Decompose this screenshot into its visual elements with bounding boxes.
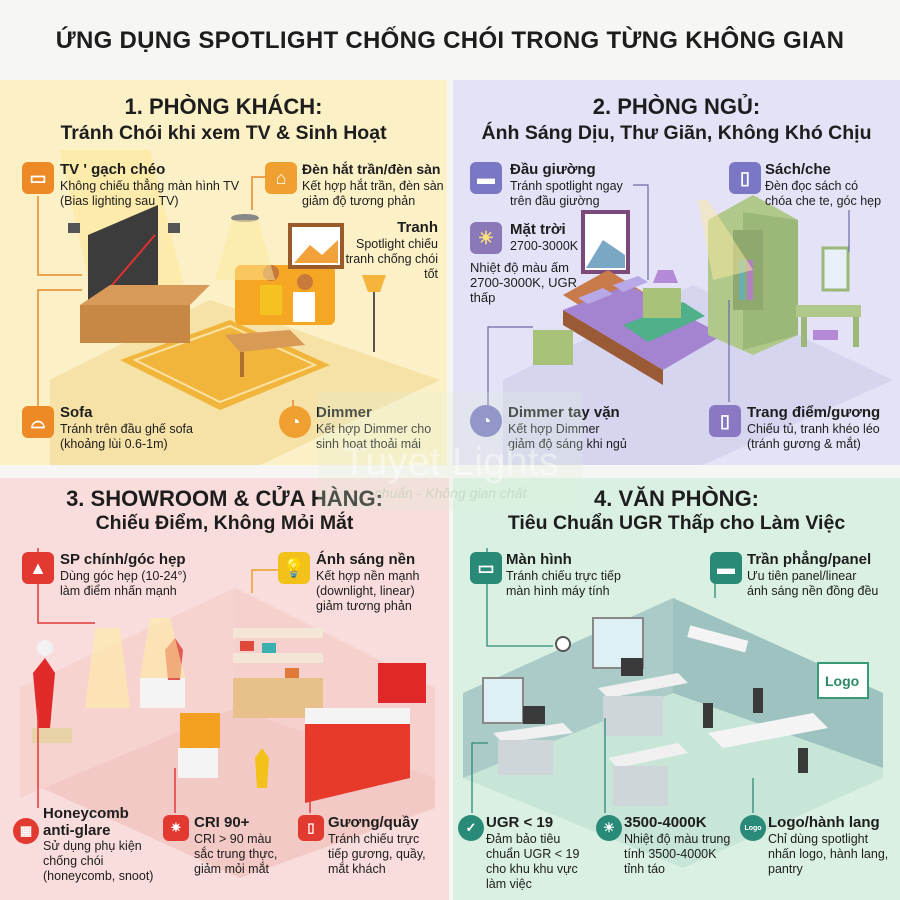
item: logo/hành lang: Logo xyxy=(744,824,762,832)
illustration: showroom xyxy=(20,548,435,878)
item: TV xyxy=(22,161,239,208)
item: CRI xyxy=(163,814,277,876)
item: đèn hắt: Đèn hắt trần/đèn sàn xyxy=(302,161,440,177)
item: màn hình: ▭ xyxy=(477,558,494,578)
heading: 2. PHÒNG NGỦ: xyxy=(593,94,760,119)
item: ánh sáng nền: Kết hợp nền mạnh (downlight, linear) giảm tương phản xyxy=(316,569,419,613)
item: trang điểm: Trang điểm/gương xyxy=(747,404,880,421)
item: đầu giường: ▬ xyxy=(477,168,495,188)
item: trần phẳng: Trần phẳng/panel xyxy=(747,551,871,568)
heading: 3. SHOWROOM & CỬA HÀNG: xyxy=(66,486,383,511)
illustration: bedroom xyxy=(487,184,892,465)
item: dimmer: sinh hoạt thoải mái xyxy=(316,437,421,451)
item: dimmer tay vặn: giảm độ sáng khi ngủ xyxy=(508,437,627,451)
item: SP chính: làm điểm nhấn mạnh xyxy=(60,584,177,598)
item: TV: ▭ xyxy=(29,168,46,188)
item: CRI: CRI > 90 màu sắc trung thực, giảm mỏi mắt xyxy=(194,832,277,876)
item: đèn hắt xyxy=(265,161,444,208)
item: tranh: Tranh xyxy=(397,219,438,236)
item: logo/hành lang: Chỉ dùng spotlight nhấn logo, hành lang, pantry xyxy=(768,832,888,876)
item: tranh: Spotlight chiếu tranh chống chói tốt xyxy=(346,237,438,281)
item: trang điểm xyxy=(709,404,880,451)
item: 3500-4000K: Nhiệt độ màu trung tính 3500-4000K tỉnh táo xyxy=(624,832,730,876)
item: UGR: UGR < 19 xyxy=(486,814,553,831)
item: UGR xyxy=(458,814,579,891)
item: TV: TV ' gạch chéo xyxy=(60,161,165,178)
item: mặt trời: Mặt trời xyxy=(510,221,566,238)
item: UGR: ✓ xyxy=(466,820,476,835)
subheading: Chiếu Điểm, Không Mỏi Mắt xyxy=(96,512,353,534)
item: dimmer: Dimmer xyxy=(316,404,372,421)
item: CRI: CRI 90+ xyxy=(194,814,249,831)
item: đầu giường: trên đầu giường xyxy=(510,194,600,208)
item: gương/quầy xyxy=(298,814,426,876)
item: mặt trời: Nhiệt độ màu ấm 2700-3000K, UGR thấp xyxy=(470,260,577,305)
watermark xyxy=(318,392,583,510)
item: ánh sáng nền xyxy=(278,550,419,613)
subheading: Ánh Sáng Dịu, Thư Giãn, Không Khó Chịu xyxy=(482,122,872,144)
item: dimmer tay vặn: ◔ xyxy=(481,410,491,430)
item: honeycomb: Sử dụng phụ kiện chống chói (honeycomb, snoot) xyxy=(43,839,153,883)
item: TV: Không chiếu thẳng màn hình TV xyxy=(60,179,239,193)
item: CRI: ✷ xyxy=(171,820,181,835)
item: gương/quầy: Gương/quầy xyxy=(328,814,419,831)
panel: văn phòng xyxy=(453,478,900,900)
item: trần phẳng: ▬ xyxy=(717,558,735,578)
item: màn hình xyxy=(470,551,621,598)
item: dimmer tay vặn: Dimmer tay vặn xyxy=(508,404,620,421)
subheading: Tiêu Chuẩn UGR Thấp cho Làm Việc xyxy=(508,512,845,534)
item: logo/hành lang: Logo/hành lang xyxy=(768,814,880,831)
item: honeycomb: ▦ xyxy=(20,823,32,838)
item: dimmer xyxy=(279,404,431,451)
illustration: office: Logo xyxy=(825,673,859,689)
item: đầu giường: Đầu giường xyxy=(510,161,596,178)
item: sách/che xyxy=(729,161,881,208)
item: trần phẳng: Ưu tiên panel/linear xyxy=(747,569,856,583)
item: sách/che: Đèn đọc sách có xyxy=(765,179,858,193)
watermark: chuẩn - Không gian chất xyxy=(375,485,526,501)
illustration: office xyxy=(463,548,883,868)
item: ánh sáng nền: Ánh sáng nền xyxy=(316,551,415,568)
item: trang điểm: (tránh gương & mắt) xyxy=(747,437,861,451)
item: SP chính xyxy=(22,551,187,598)
heading: 4. VĂN PHÒNG: xyxy=(594,486,759,511)
item: trần phẳng: ánh sáng nền đồng đều xyxy=(747,584,878,598)
item: UGR: Đảm bảo tiêu chuẩn UGR < 19 cho khu khu vực làm việc xyxy=(486,832,579,891)
item: sofa: Sofa xyxy=(60,404,93,421)
panel: showroom xyxy=(0,478,449,900)
item: dimmer: Kết hợp Dimmer cho xyxy=(316,422,431,436)
item: sách/che: ▯ xyxy=(740,168,750,188)
item: sách/che: Sách/che xyxy=(765,161,831,178)
panel: phòng ngủ xyxy=(453,80,900,465)
item: màn hình: màn hình máy tính xyxy=(506,584,610,598)
item: SP chính: ▲ xyxy=(29,558,47,578)
illustration: living room xyxy=(37,150,440,465)
heading: 1. PHÒNG KHÁCH: xyxy=(124,94,322,119)
item: sách/che: chóa che te, góc hẹp xyxy=(765,194,881,208)
item: dimmer tay vặn: Kết hợp Dimmer xyxy=(508,422,600,436)
item: trần phẳng xyxy=(710,550,878,598)
item: sofa xyxy=(22,404,193,451)
title: ỨNG DỤNG SPOTLIGHT CHỐNG CHÓI TRONG TỪNG KHÔNG GIAN xyxy=(56,27,844,54)
subheading: Tránh Chói khi xem TV & Sinh Hoạt xyxy=(60,122,387,144)
item: 3500-4000K xyxy=(596,814,730,876)
watermark: Tuyet Lights xyxy=(342,440,559,484)
item: honeycomb: anti-glare xyxy=(43,822,111,839)
item: sofa: (khoảng lùi 0.6-1m) xyxy=(60,437,168,451)
item: gương/quầy: ▯ xyxy=(307,820,315,835)
item: 3500-4000K: 3500-4000K xyxy=(624,814,707,831)
item: mặt trời xyxy=(470,221,578,305)
item: honeycomb: Honeycomb xyxy=(43,805,129,822)
item: màn hình: Tránh chiếu trực tiếp xyxy=(506,569,621,583)
item: đầu giường: Tránh spotlight ngay xyxy=(510,179,623,193)
item: logo/hành lang xyxy=(740,814,888,876)
item: TV: (Bias lighting sau TV) xyxy=(60,194,179,208)
item: gương/quầy: Tránh chiếu trực tiếp gương, quầy, mắt khách xyxy=(328,832,426,876)
item: dimmer: ◔ xyxy=(290,412,300,432)
item: dimmer tay vặn xyxy=(470,404,627,451)
item: mặt trời: ☀ xyxy=(478,228,494,248)
item: sofa: ⌓ xyxy=(31,412,45,432)
item: màn hình: Màn hình xyxy=(506,551,572,568)
item: đèn hắt: Kết hợp hắt trần, đèn sàn xyxy=(302,179,444,193)
item: đèn hắt: giảm độ tương phản xyxy=(302,194,415,208)
item: mặt trời: 2700-3000K xyxy=(510,239,578,253)
item: honeycomb xyxy=(13,805,153,883)
item: SP chính: SP chính/góc hẹp xyxy=(60,551,186,568)
item: trang điểm: Chiếu tủ, tranh khéo léo xyxy=(747,422,880,436)
item: SP chính: Dùng góc hẹp (10-24°) xyxy=(60,569,187,583)
item: sofa: Tránh trên đầu ghế sofa xyxy=(60,422,193,436)
item: 3500-4000K: ☀ xyxy=(603,820,615,835)
panel: phòng khách xyxy=(0,80,447,465)
item: trang điểm: ▯ xyxy=(720,410,730,430)
item: ánh sáng nền: 💡 xyxy=(283,558,305,578)
item: đèn hắt: ⌂ xyxy=(276,168,286,188)
item: đầu giường xyxy=(470,161,623,208)
